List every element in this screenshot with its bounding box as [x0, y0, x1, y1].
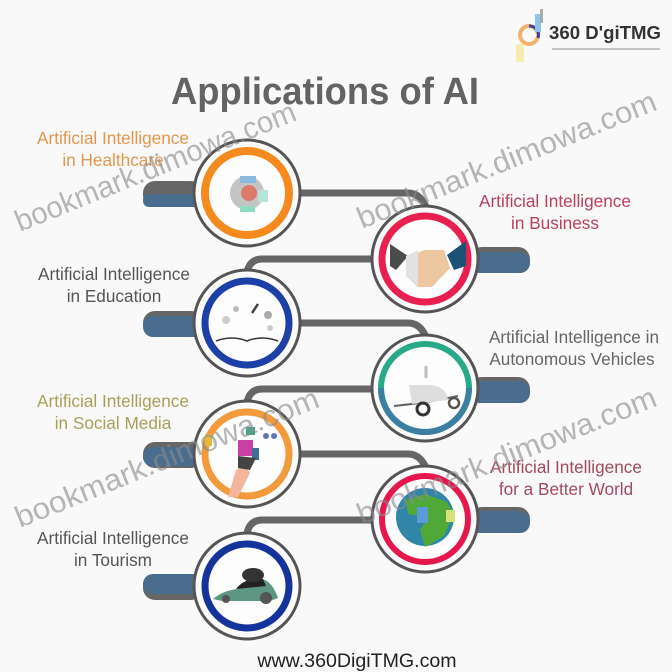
icon: self-driving car: [394, 366, 459, 415]
label: tourism: in Tourism: [74, 550, 152, 570]
panel: education circle: [194, 270, 300, 376]
panel: better world circle: [372, 466, 478, 572]
icon: open book: [216, 304, 278, 341]
title: Applications of AI: [171, 71, 479, 113]
icon: globe: [396, 488, 455, 547]
label: better world: Artificial Intelligence: [490, 457, 642, 477]
panel: social media circle: [194, 401, 300, 507]
icon: logo mark: [516, 9, 543, 62]
watermarks: bookmark.dimowa.com: [352, 381, 661, 531]
logo: [516, 9, 661, 62]
connectors between circles: [247, 193, 426, 533]
watermarks: [10, 85, 661, 534]
panel: autonomous vehicles circle: [372, 335, 478, 441]
label: autonomous vehicles: Artificial Intelligence in: [489, 327, 659, 347]
icon: handshake: [390, 241, 466, 287]
panel: business circle: [372, 206, 478, 312]
label: business: Artificial Intelligence: [479, 191, 631, 211]
left stub bars: [143, 181, 203, 600]
label: education: in Education: [67, 286, 161, 306]
label: education: Artificial Intelligence: [38, 264, 190, 284]
watermarks: bookmark.dimowa.com: [352, 85, 661, 235]
label: business: in Business: [511, 213, 599, 233]
icon: hand holding icons: [205, 427, 277, 497]
label: social media: Artificial Intelligence: [37, 391, 189, 411]
website url: www.360DigiTMG.com: [256, 650, 457, 672]
icon: brain and heart: [230, 176, 268, 212]
icon: car with luggage: [213, 568, 278, 604]
label: healthcare: Artificial Intelligence: [37, 128, 189, 148]
panel: tourism circle: [194, 533, 300, 639]
label: healthcare: in Healthcare: [62, 150, 164, 170]
label: autonomous vehicles: Autonomous Vehicles: [489, 349, 655, 369]
label: better world: for a Better World: [499, 479, 633, 499]
watermarks: bookmark.dimowa.com: [10, 382, 324, 534]
label: social media: in Social Media: [55, 413, 172, 433]
watermarks: bookmark.dimowa.com: [10, 96, 301, 238]
right stub bars: [470, 247, 530, 533]
label: tourism: Artificial Intelligence: [37, 528, 189, 548]
logo: 360 D'giTMG: [549, 23, 661, 43]
panel: healthcare circle: [194, 140, 300, 246]
